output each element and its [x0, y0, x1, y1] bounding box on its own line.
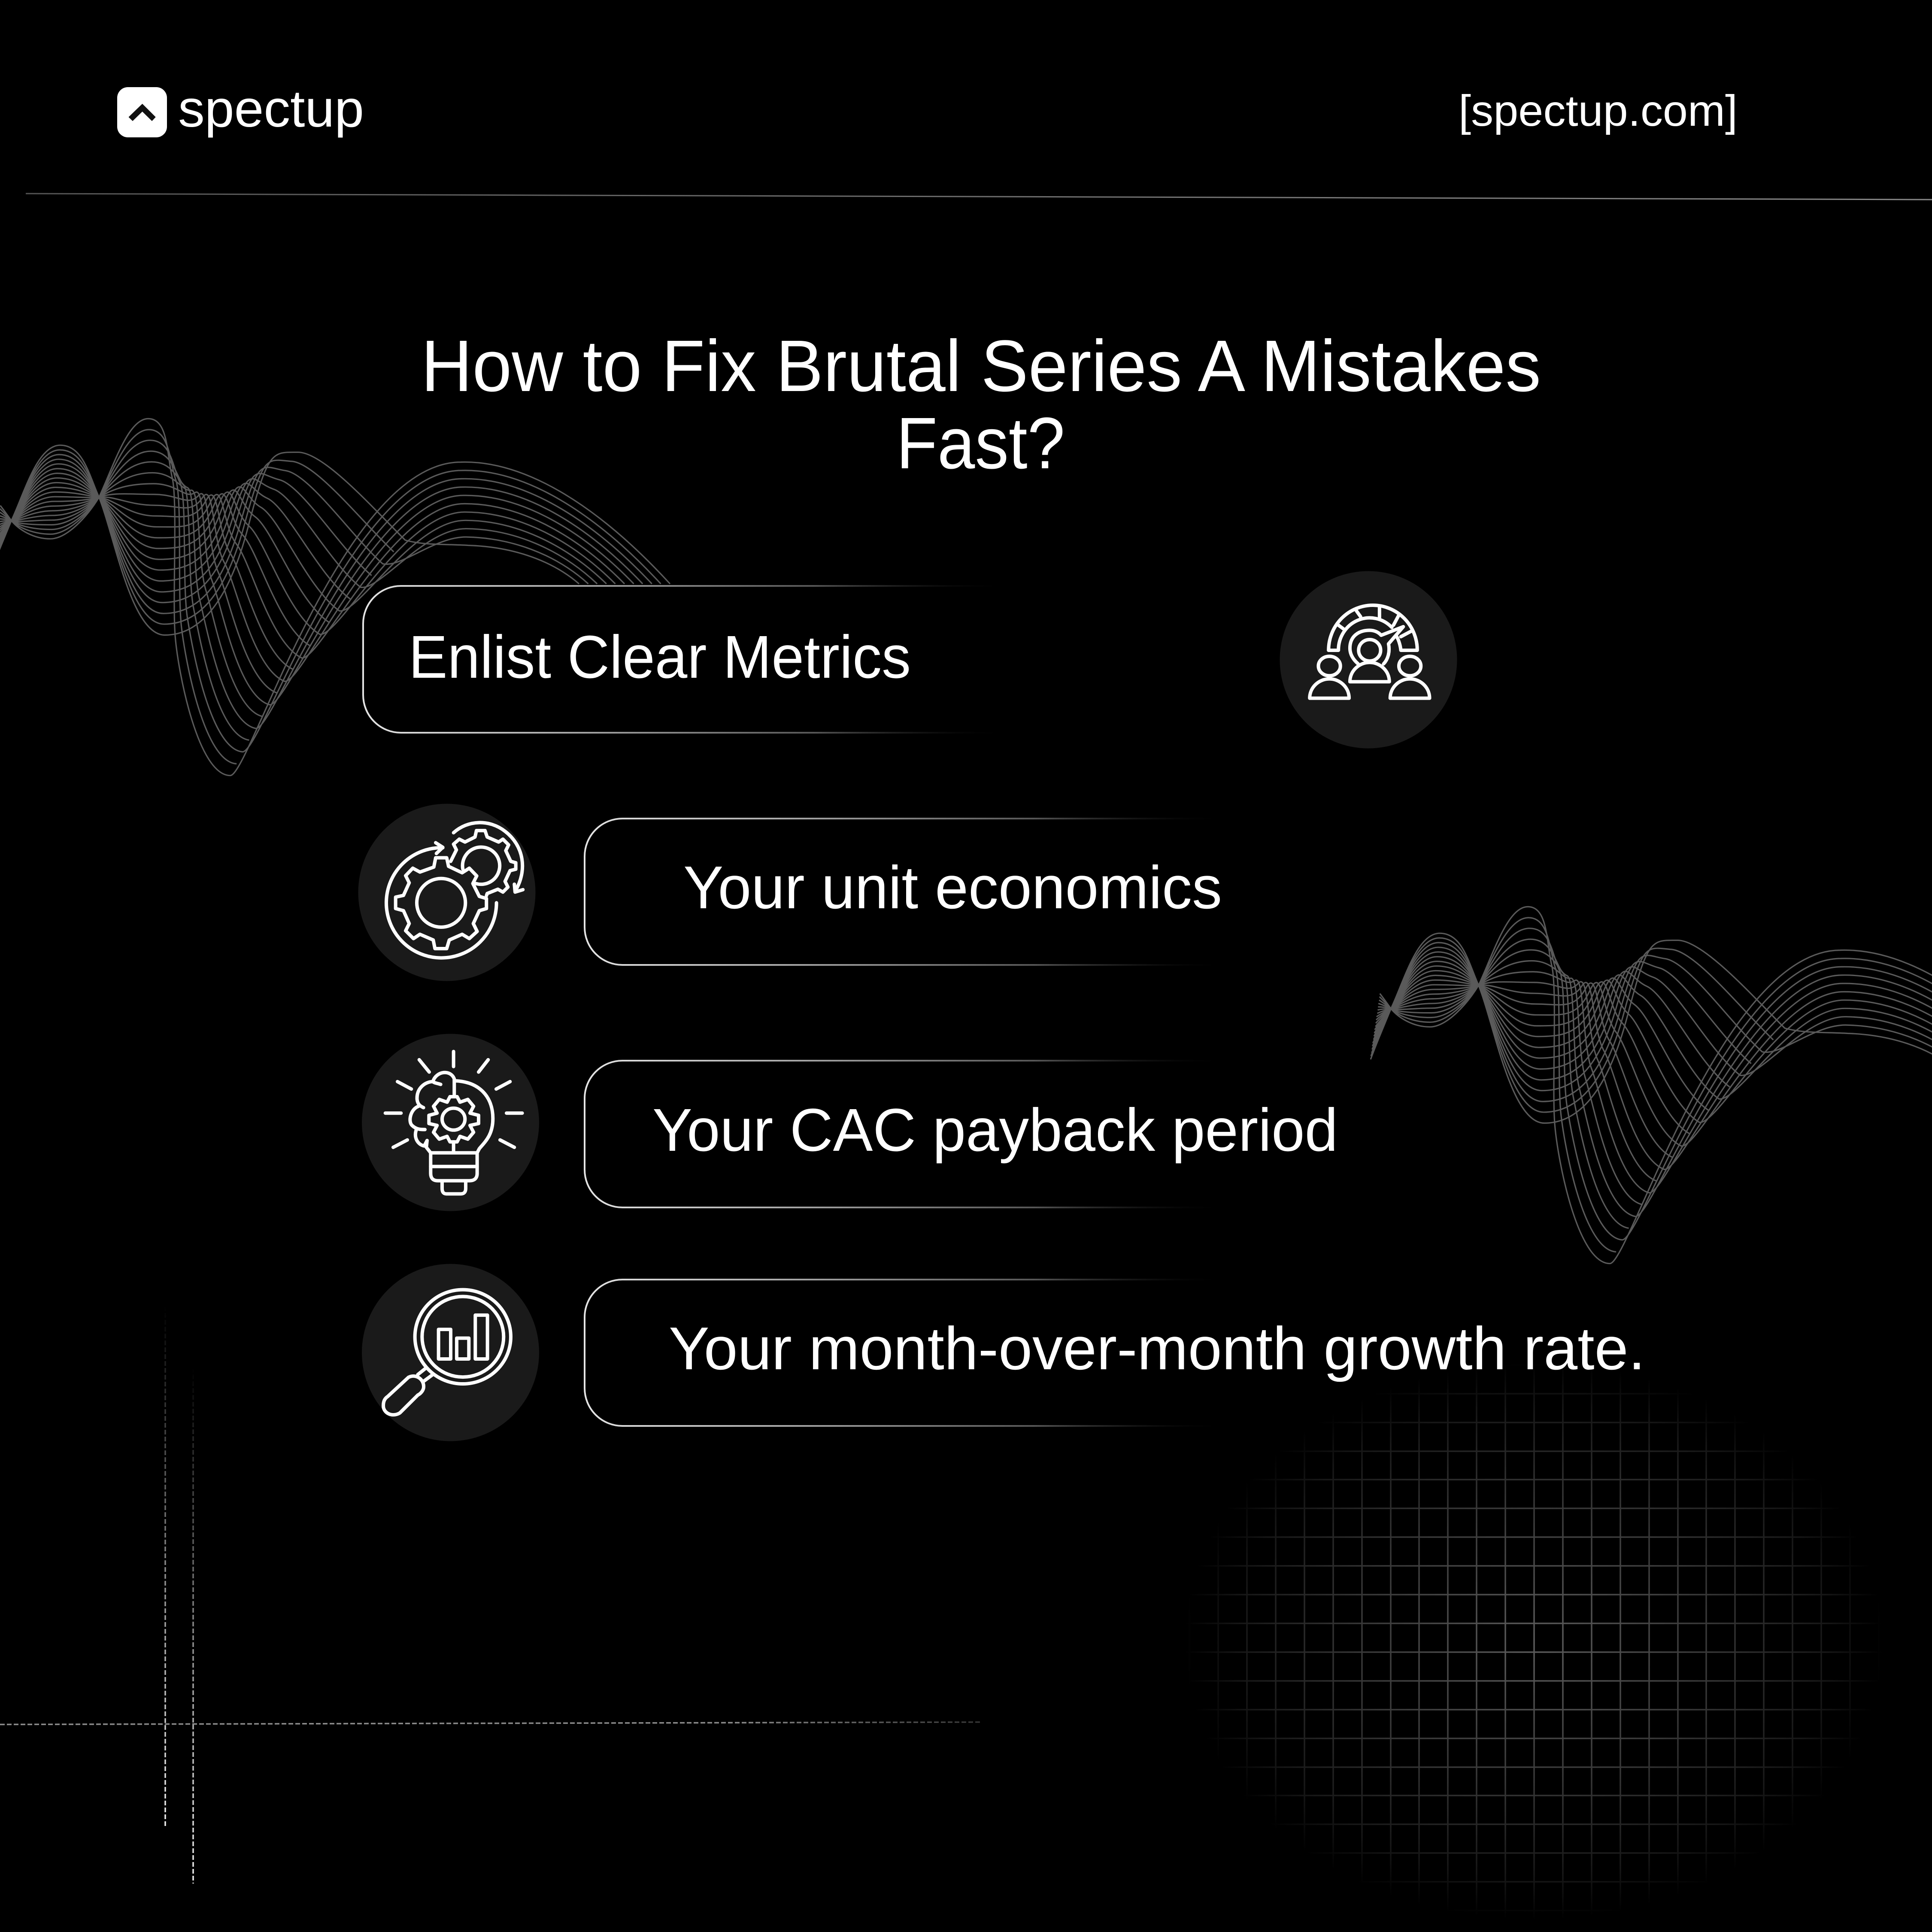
- grid pattern: bottom right: [1159, 1331, 1897, 1932]
- row 1 label: Enlist Clear Metrics: [409, 623, 911, 691]
- row 3 label: Your CAC payback period: [652, 1096, 1338, 1164]
- logo wordmark: spectup: [178, 79, 364, 138]
- icon: gauge and people: [1280, 571, 1457, 749]
- dashed lines: bottom left: [0, 1306, 981, 1883]
- title: [421, 325, 1541, 484]
- pill outline: [585, 1061, 1314, 1207]
- logo mark: [117, 87, 167, 137]
- icon: lightbulb with brain and gear: [362, 1034, 539, 1211]
- title: Fast?: [896, 403, 1065, 484]
- pill outline: [585, 819, 1314, 965]
- website link: [spectup.com]: [1459, 86, 1738, 135]
- row 2: your unit economics: [358, 804, 1314, 981]
- icon: magnifier with bar chart: [362, 1264, 539, 1441]
- pill outline: [363, 586, 1093, 733]
- row 3: your cac payback period: [362, 1034, 1338, 1211]
- logo: spectup: [117, 79, 364, 138]
- row 1: enlist clear metrics: [363, 571, 1457, 749]
- icon: gears with arrows: [358, 804, 536, 981]
- pill outline: [585, 1280, 1314, 1426]
- row 4 label: Your month-over-month growth rate.: [669, 1314, 1645, 1382]
- header divider: [26, 194, 1932, 200]
- wave decoration: right: [1371, 907, 1932, 1264]
- row 2 label: Your unit economics: [683, 853, 1222, 921]
- row 4: your month-over-month growth rate: [362, 1264, 1645, 1441]
- title: How to Fix Brutal Series A Mistakes: [421, 325, 1541, 407]
- wave decoration: left: [0, 419, 670, 776]
